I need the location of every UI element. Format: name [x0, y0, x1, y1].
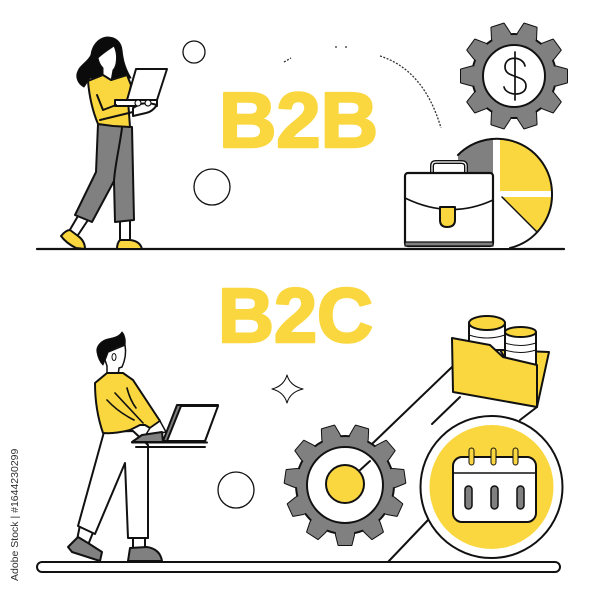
stock credit text: Adobe Stock | #1644230299: [9, 449, 21, 581]
coins and folder: [452, 316, 549, 407]
coin stack right: [505, 332, 536, 368]
laptop: [127, 69, 167, 100]
hands: [145, 421, 166, 436]
decorative circle small: [183, 41, 205, 63]
trousers: [78, 431, 148, 538]
ground line B2B: [37, 248, 564, 250]
keyboard hand: [132, 432, 163, 442]
shoes: [61, 230, 85, 249]
man with laptop: [68, 332, 218, 561]
coin stack left: [469, 323, 505, 350]
ground bar B2C: [37, 562, 560, 572]
heading: B2C: B2C: [218, 273, 373, 359]
folder back: [500, 350, 549, 407]
decorative circle large: [194, 169, 230, 205]
decorative circle: [218, 472, 254, 508]
forearm and hand: [133, 103, 157, 116]
panel: B2B: [37, 23, 567, 249]
folder front: [452, 338, 537, 407]
dotted arc: [284, 47, 441, 128]
ear: [112, 354, 116, 360]
heading: B2B: B2B: [219, 76, 378, 164]
calendar badge: [420, 416, 562, 558]
sweater: [95, 373, 160, 433]
woman with laptop: [61, 37, 167, 249]
gear with dollar: [461, 23, 567, 129]
shoes: [68, 537, 102, 561]
trousers: [75, 124, 134, 222]
calendar rings: [469, 448, 474, 465]
calendar: [453, 457, 536, 522]
face and neck: [98, 46, 117, 81]
clasp: [440, 207, 455, 227]
legs: [68, 216, 130, 242]
connector lines: [373, 367, 537, 562]
sweater: [88, 75, 131, 127]
calendar slots: [465, 486, 472, 509]
gear hub: [326, 465, 364, 503]
hair: [77, 37, 131, 87]
hair: [97, 332, 125, 365]
gear with yellow hub: [284, 425, 406, 545]
laptop: [163, 405, 218, 441]
pie chart: [458, 138, 559, 248]
panel: B2C: [37, 273, 562, 572]
desk: [132, 442, 207, 538]
neck and face: [105, 345, 126, 376]
sparkle star: [272, 375, 303, 403]
legs: [77, 525, 145, 552]
dollar sign: [504, 52, 526, 100]
briefcase: [405, 162, 493, 246]
